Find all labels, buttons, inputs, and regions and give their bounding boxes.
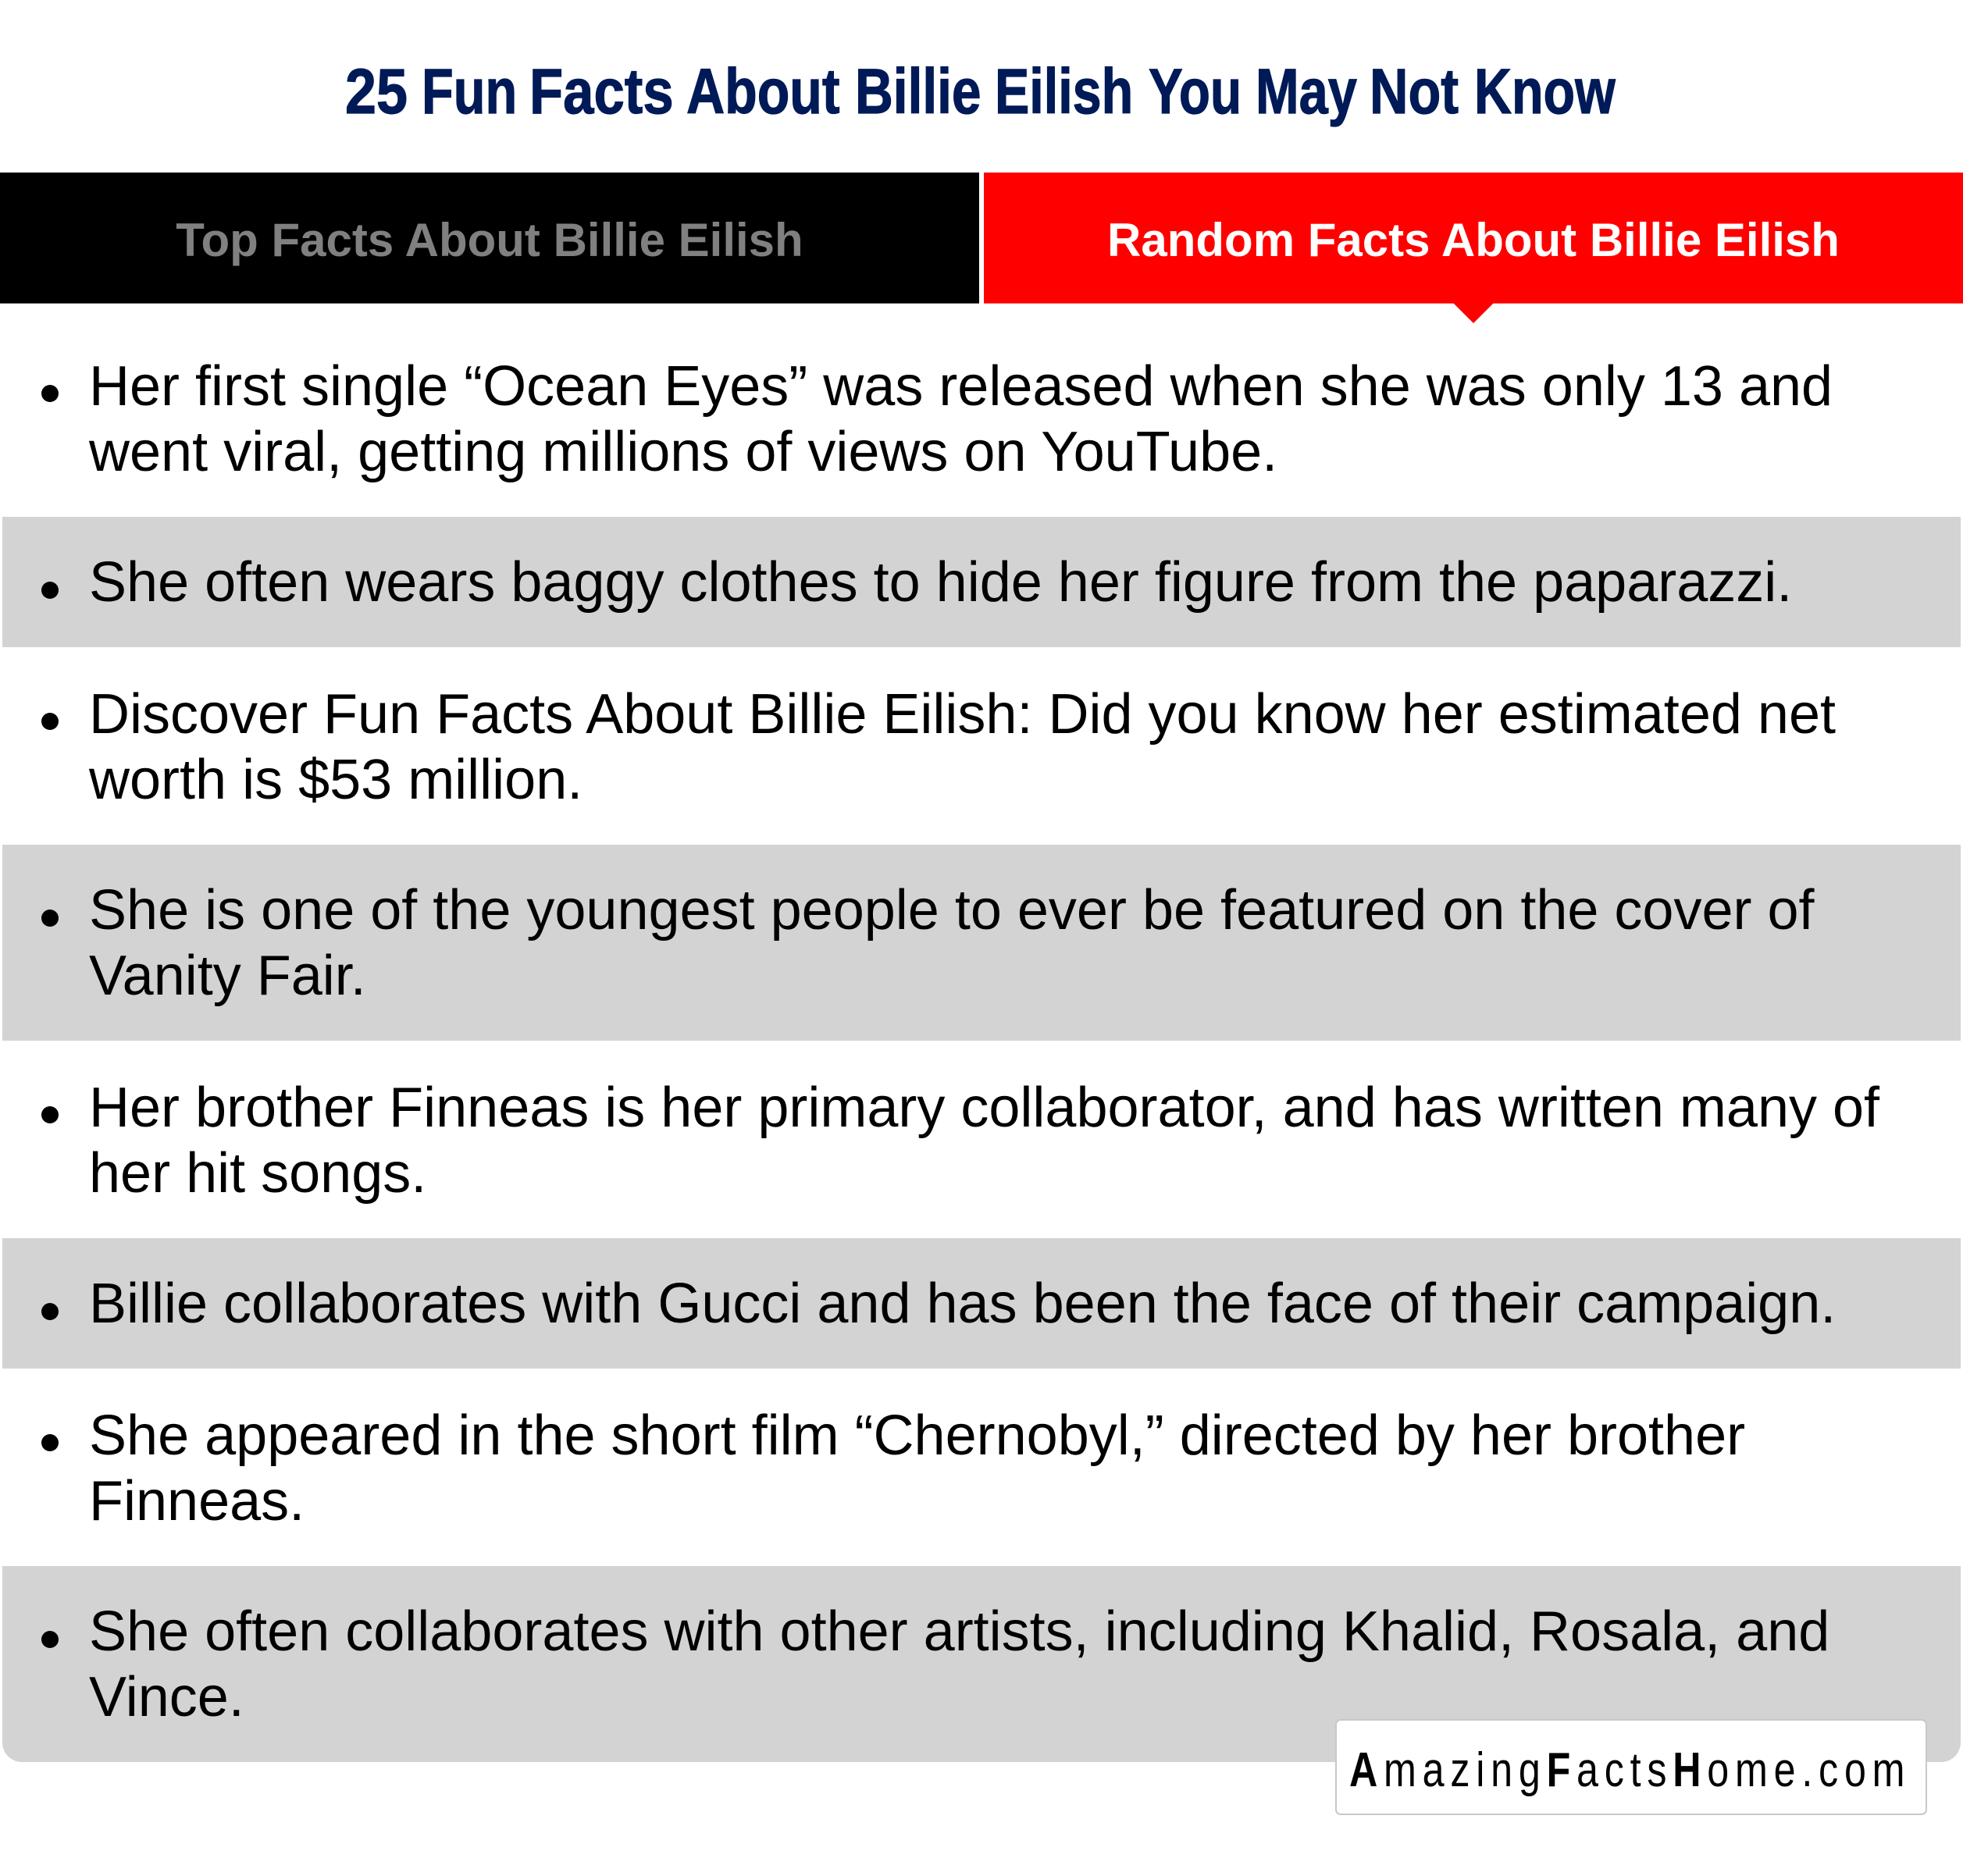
title: Fun <box>422 56 517 127</box>
watermark text: AmazingFactsHome.com <box>1349 1743 1911 1797</box>
fact 8 <box>2 1566 1961 1762</box>
title <box>345 56 1616 127</box>
fact 3 <box>41 683 1836 811</box>
title: Facts <box>529 56 674 127</box>
fact 5: her hit songs. <box>89 1142 426 1205</box>
fact 4: She is one of the youngest people to ever be featured on the cover of <box>89 879 1815 942</box>
watermark badge <box>1335 1719 1927 1815</box>
title: You <box>1149 56 1242 127</box>
tab: random facts active <box>984 173 1963 304</box>
fact 6 <box>2 1238 1961 1369</box>
fact 7: Finneas. <box>89 1470 305 1532</box>
tab: random facts active: Random Facts About Billie Eilish <box>1107 214 1840 266</box>
fact 1 <box>41 355 1833 483</box>
fact 2: She often wears baggy clothes to hide her figure from the paparazzi. <box>89 551 1792 614</box>
fact 1: Her first single “Ocean Eyes” was released when she was only 13 and <box>89 355 1833 418</box>
fact 3: worth is $53 million. <box>89 749 582 811</box>
title: Billie <box>855 56 981 127</box>
fact 4: Vanity Fair. <box>89 945 366 1007</box>
tab: top facts: Top Facts About Billie Eilish <box>176 214 803 266</box>
fact 3: Discover Fun Facts About Billie Eilish: Did you know her estimated net <box>89 683 1836 746</box>
fact 5 <box>41 1077 1880 1205</box>
title: 25 <box>345 56 408 127</box>
title: Not <box>1370 56 1459 127</box>
title: May <box>1256 56 1357 127</box>
fact 7 <box>41 1404 1745 1532</box>
icon: active tab pointer <box>1453 303 1494 323</box>
fact 6: Billie collaborates with Gucci and has been the face of their campaign. <box>89 1273 1836 1335</box>
tab: top facts <box>0 173 979 304</box>
title: Know <box>1474 56 1616 127</box>
title: Eilish <box>995 56 1133 127</box>
fact 2 <box>2 517 1961 647</box>
fact 8: She often collaborates with other artists, including Khalid, Rosala, and <box>89 1600 1829 1663</box>
title: About <box>686 56 840 127</box>
fact 8: Vince. <box>89 1666 244 1728</box>
fact 5: Her brother Finneas is her primary collaborator, and has written many of <box>89 1077 1879 1139</box>
fact 4 <box>2 845 1961 1041</box>
fact 1: went viral, getting millions of views on YouTube. <box>89 421 1277 483</box>
fact 7: She appeared in the short film “Chernobyl,” directed by her brother <box>89 1404 1745 1467</box>
